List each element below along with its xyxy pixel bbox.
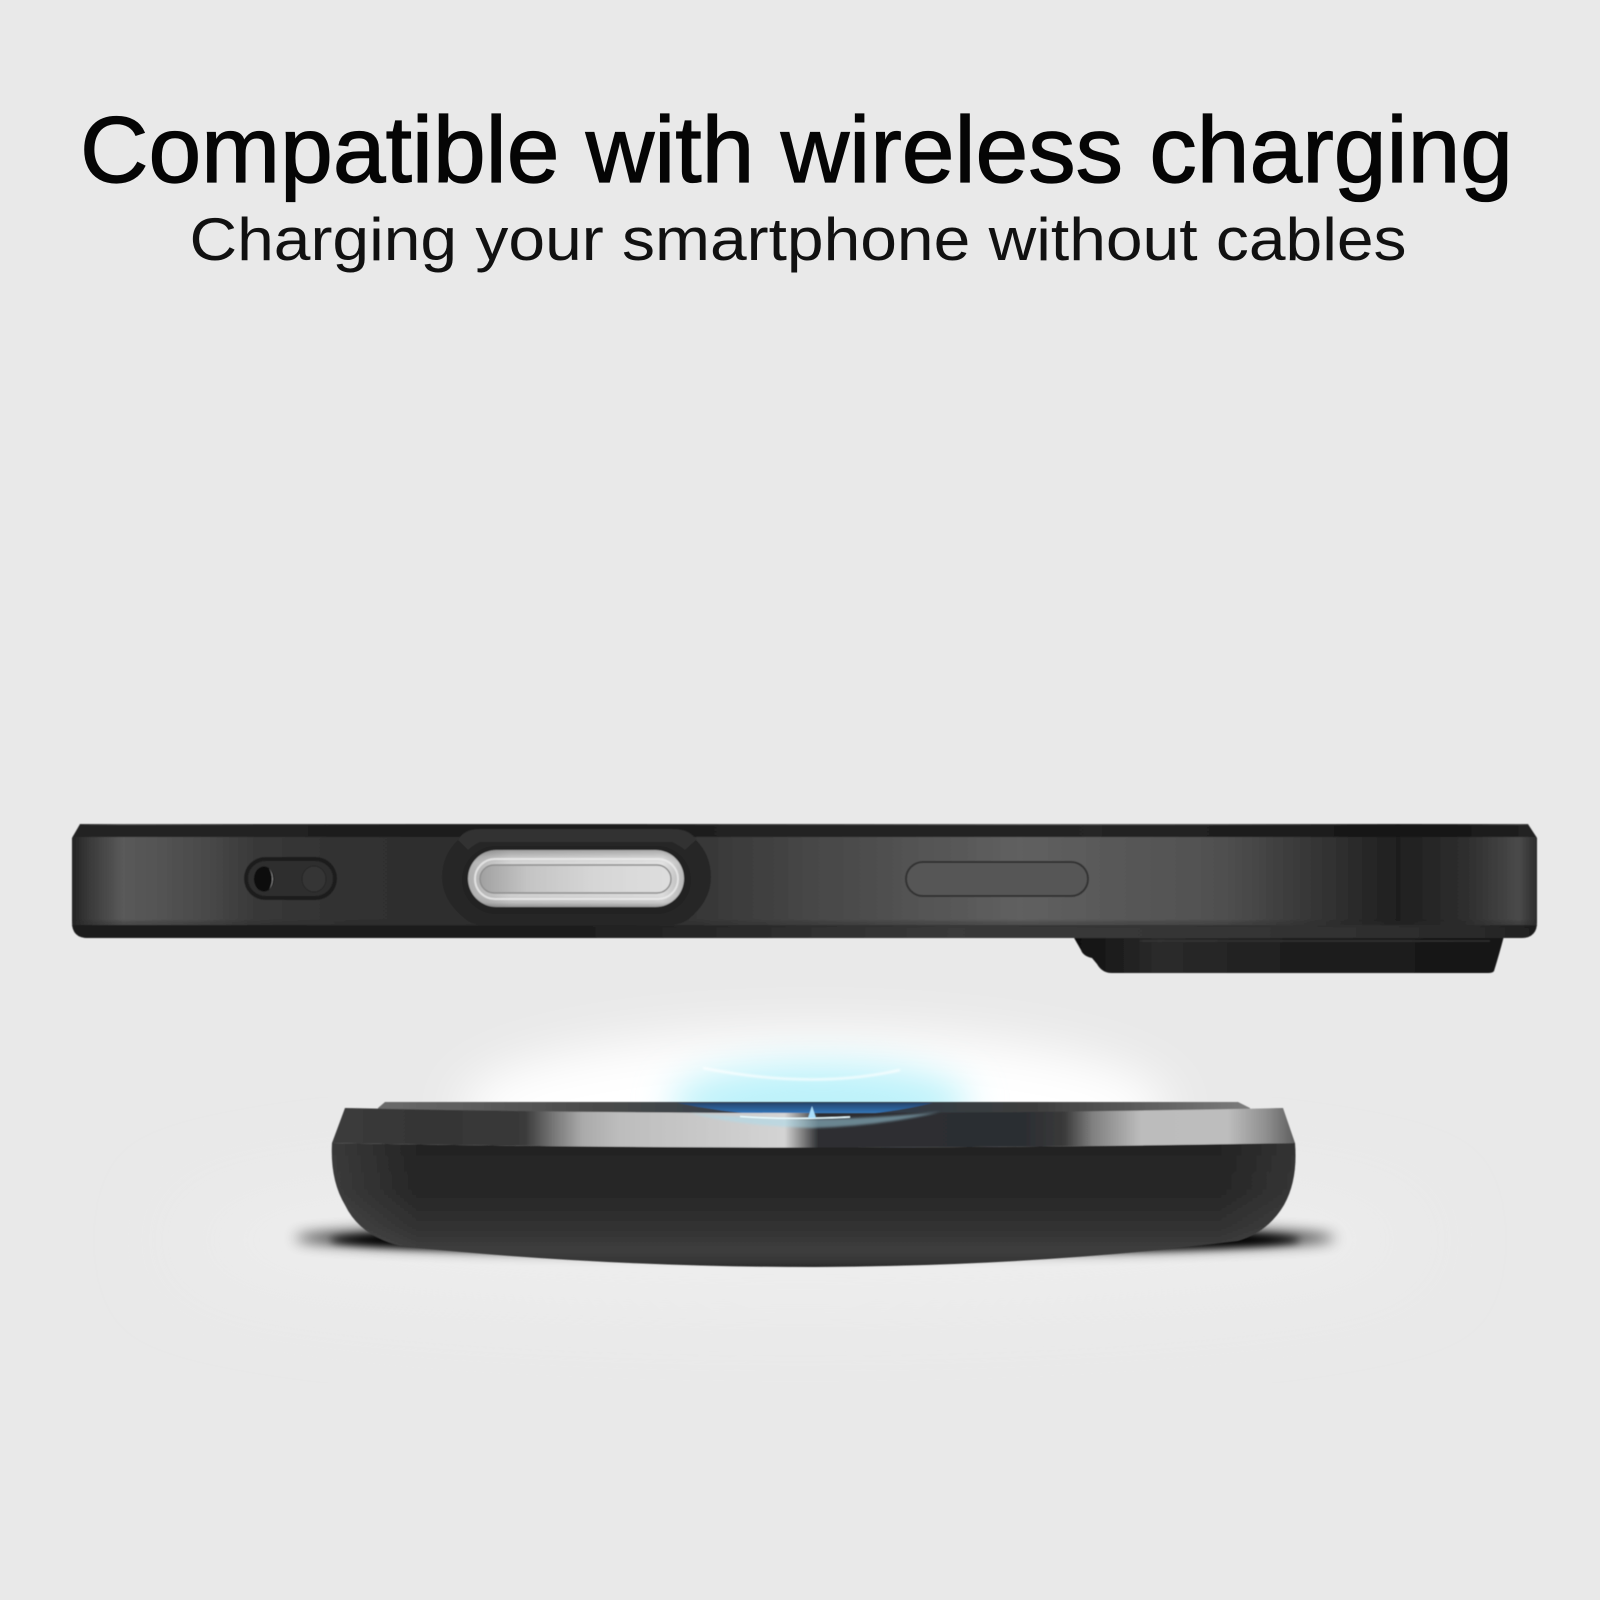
glow arc [703, 1068, 900, 1080]
light spark [808, 1106, 816, 1118]
side button [906, 862, 1088, 896]
charger metal ring [332, 1108, 1295, 1148]
camera bump [1073, 936, 1504, 973]
subtitle: Charging your smartphone without cables [190, 206, 1406, 273]
speaker grille [244, 857, 337, 900]
phone body [60, 824, 1550, 939]
charger base [332, 1143, 1296, 1267]
floor shadow [295, 1223, 1335, 1253]
cyan glow [670, 1063, 970, 1143]
white glow [460, 1032, 1170, 1184]
charging port surround [442, 829, 711, 925]
base edge shading [332, 1143, 1296, 1267]
background halo [180, 1175, 1420, 1305]
bright line [740, 1116, 850, 1118]
charger top lid [378, 1102, 1250, 1116]
blue light [677, 1103, 933, 1117]
title: Compatible with wireless charging [80, 97, 1513, 202]
wireless charger pad [180, 1032, 1420, 1305]
charging port [468, 850, 684, 907]
phone case side view [60, 824, 1550, 973]
blue ring reflection [690, 1112, 940, 1128]
